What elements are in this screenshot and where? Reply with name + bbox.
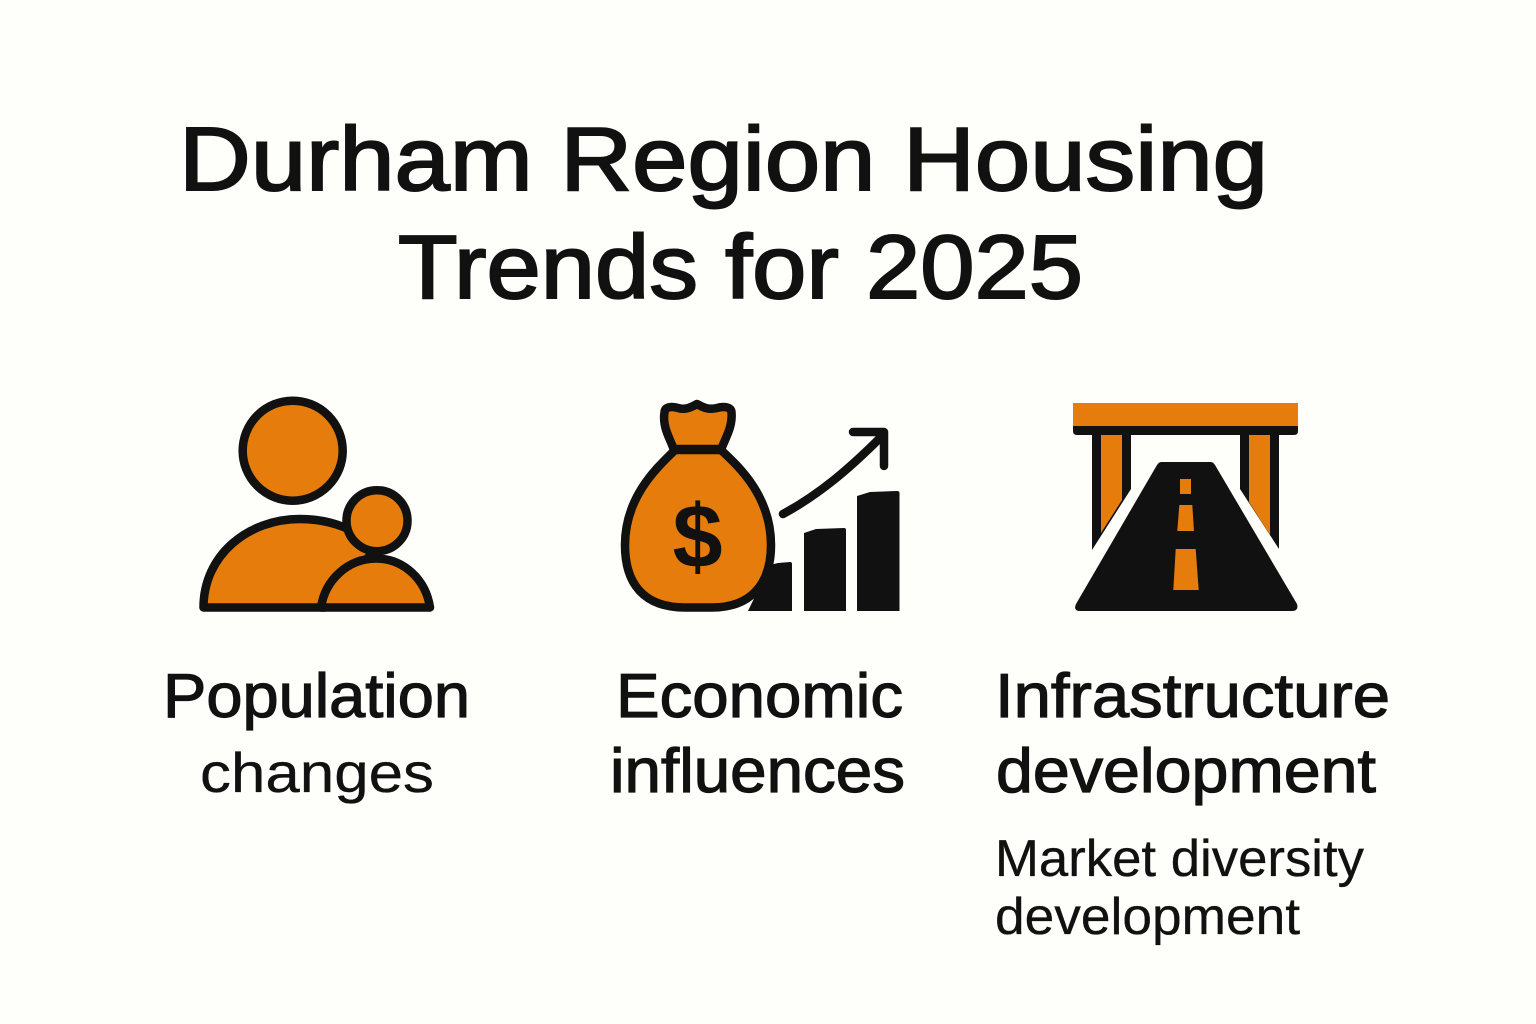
title	[179, 110, 1268, 318]
icon: two people	[204, 401, 430, 608]
panel: economic influences	[610, 404, 905, 806]
title: Trends for 2025	[398, 218, 1083, 318]
icon: overpass and road	[1073, 403, 1298, 611]
panel: infrastructure development	[995, 403, 1390, 946]
label: market diversity development	[995, 830, 1364, 946]
icon: money bag: $	[672, 488, 723, 588]
label: market diversity development: Market diversity	[995, 830, 1364, 888]
label: changes: changes	[200, 741, 434, 804]
label: market diversity development: development	[995, 888, 1301, 946]
label: economic: Economic	[616, 662, 903, 731]
title: Durham Region Housing	[179, 110, 1268, 210]
label: development: development	[996, 737, 1376, 806]
icon: bar chart with arrow	[748, 432, 900, 611]
icon: money bag	[625, 404, 771, 608]
label: influences: influences	[610, 737, 905, 806]
label: population: Population	[163, 662, 470, 731]
panel: population changes	[163, 401, 470, 804]
label: infrastructure: Infrastructure	[995, 662, 1390, 731]
